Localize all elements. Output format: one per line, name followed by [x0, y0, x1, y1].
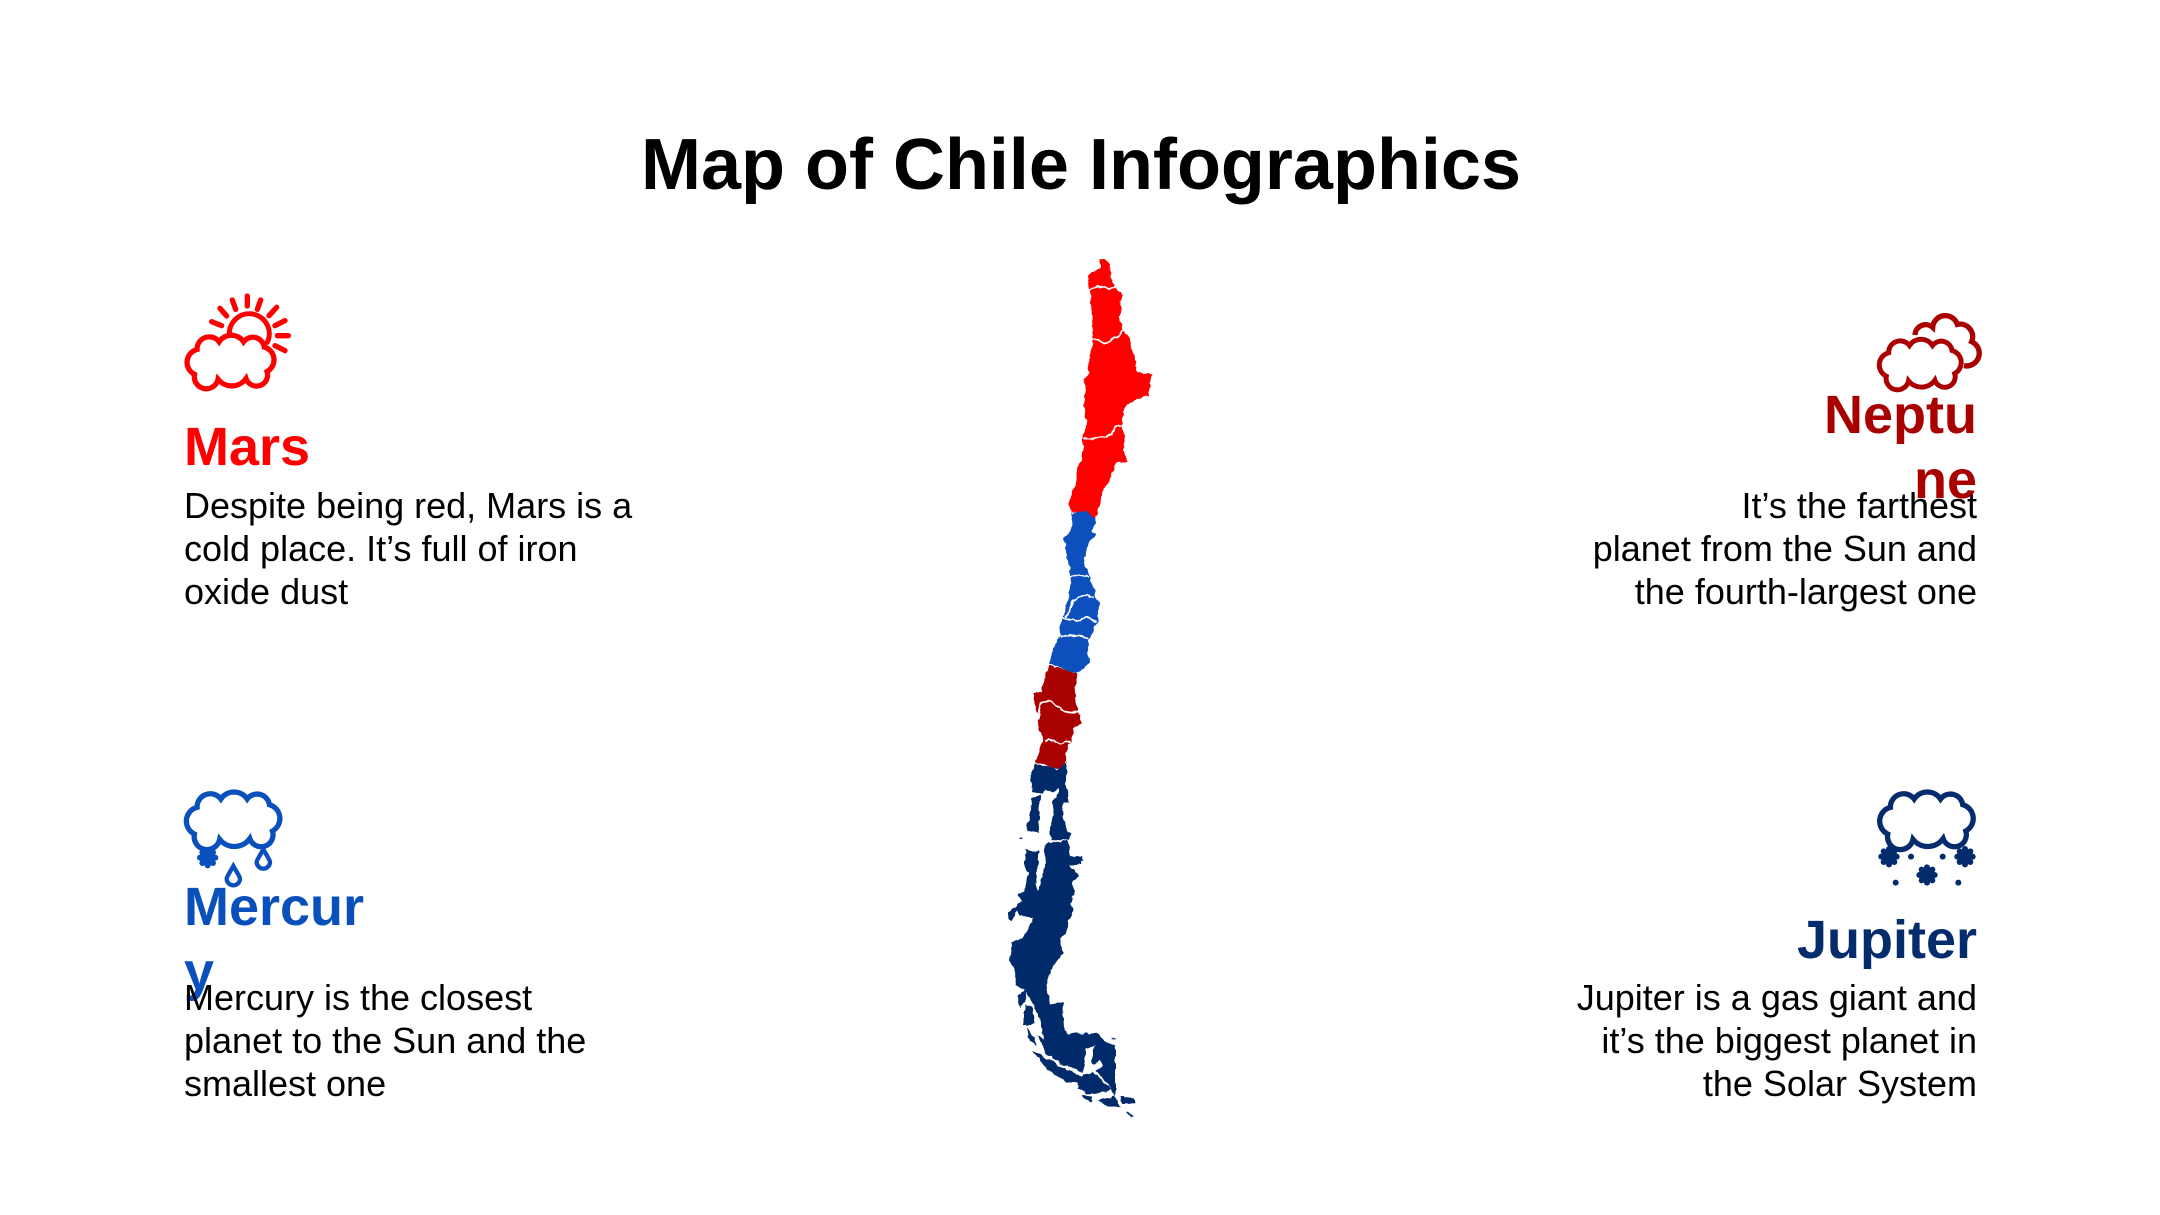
- panel: Jupiter: [1577, 789, 1977, 1104]
- text: Mars description: Despite being red, Mars is a: [184, 484, 632, 526]
- text: Mars description: cold place. It’s full of iron: [184, 528, 578, 569]
- region group: navy south: [1008, 763, 1135, 1118]
- icon: two clouds: [1876, 313, 1982, 392]
- text: Neptune description: It’s the farthest: [1742, 484, 1977, 526]
- panel: Mercury: [184, 789, 586, 1104]
- panel: Mars: [184, 293, 632, 612]
- heading: Jupiter: Jupiter: [1797, 910, 1977, 970]
- region group: red north: [1068, 258, 1153, 518]
- title: Map of Chile Infographics: [641, 125, 1521, 205]
- text: Jupiter description: [1577, 976, 1977, 1104]
- text: Mercury description: Mercury is the closest: [184, 976, 532, 1018]
- heading: Neptune: [1824, 385, 1977, 510]
- text: Neptune description: [1593, 484, 1977, 612]
- region group: dark red south-centre: [1033, 666, 1081, 770]
- text: Jupiter description: Jupiter is a gas giant and: [1577, 976, 1977, 1018]
- map of Chile: [1008, 258, 1152, 1118]
- text: Mercury description: smallest one: [184, 1063, 386, 1104]
- panel: Neptune: [1593, 313, 1982, 612]
- heading: Mercury: y: [184, 942, 214, 1002]
- text: Mercury description: planet to the Sun and the: [184, 1020, 586, 1061]
- heading: Neptune: ne: [1914, 450, 1977, 510]
- text: Mars description: [184, 484, 632, 612]
- heading: Mercury: [184, 877, 364, 1002]
- heading: Mercury: Mercur: [184, 877, 364, 937]
- icon: sun behind cloud: [184, 293, 291, 392]
- text: Mercury description: [184, 976, 586, 1104]
- text: Neptune description: planet from the Sun and: [1593, 528, 1977, 569]
- heading: Neptune: Neptu: [1824, 385, 1977, 445]
- text: Neptune description: the fourth-largest one: [1635, 571, 1977, 612]
- region group: blue centre: [1049, 510, 1099, 673]
- icon: cloud with snow and rain: [184, 789, 283, 888]
- text: Mars description: oxide dust: [184, 571, 348, 612]
- heading: Mars: Mars: [184, 417, 310, 477]
- text: Jupiter description: it’s the biggest planet in: [1601, 1020, 1977, 1061]
- icon: cloud with snowflakes: [1877, 789, 1976, 886]
- text: Jupiter description: the Solar System: [1703, 1063, 1977, 1104]
